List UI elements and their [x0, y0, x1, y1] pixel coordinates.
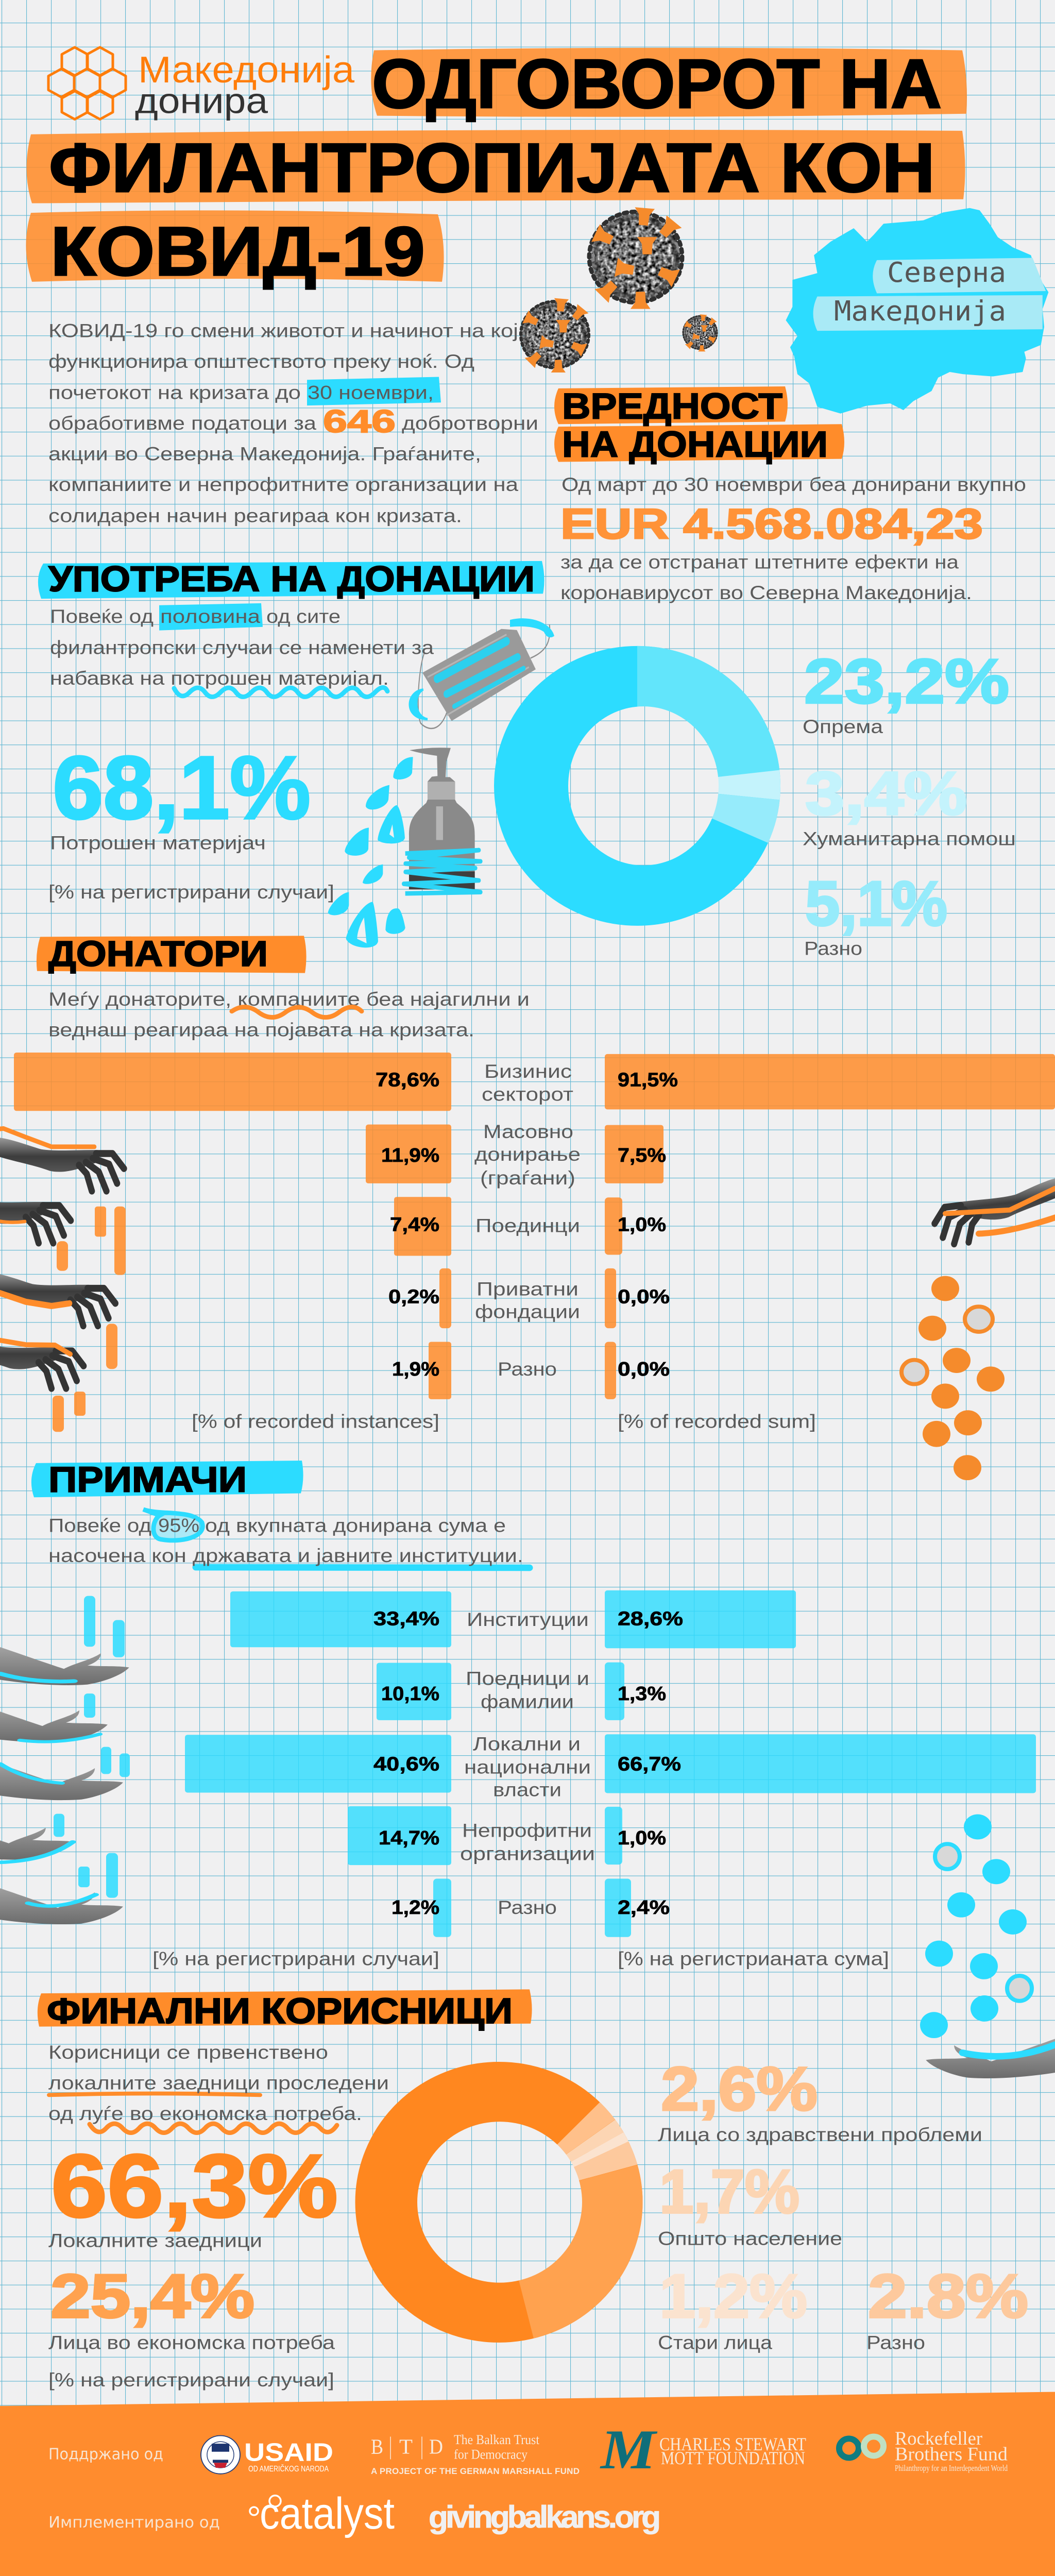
- chart: donor bars: 78,6%: [376, 1069, 439, 1091]
- intro text: Корисници се првенствено: [48, 2041, 328, 2063]
- chart: donor bars: Бизинис: [484, 1060, 572, 1082]
- logo: Rockefeller Brothers Fund: Philanthropy for an Interdependent World: [895, 2463, 1008, 2473]
- title: ОДГОВОРОТ НА: [372, 45, 942, 123]
- stat: 1,2% стари лица: 1,2%: [659, 2261, 807, 2331]
- title band 3: [26, 210, 444, 282]
- logo: Balkan Trust for Democracy: A PROJECT OF THE GERMAN MARSHALL FUND: [371, 2466, 580, 2476]
- stat: 1,7% општо население: Општо население: [658, 2228, 842, 2249]
- logo: Balkan Trust for Democracy: B: [371, 2435, 383, 2459]
- intro text: 95%: [158, 1515, 199, 1536]
- stat: 3,4% хуманитарна помош: [803, 759, 1016, 850]
- intro text block: солидарен начин реагираа кон кризата.: [48, 505, 462, 527]
- panel: донатори: [0, 934, 1055, 1480]
- icon: giving hands left: [0, 1128, 126, 1432]
- chart: recipient bars: Локални и: [473, 1733, 581, 1754]
- heading: финални корисници: ФИНАЛНИ КОРИСНИЦИ: [47, 1991, 513, 2031]
- logo: Balkan Trust for Democracy: T: [399, 2435, 413, 2459]
- intro text block: акции во Северна Македонија. Граѓаните,: [48, 443, 481, 464]
- intro text: Меѓу донаторите, компаниите беа најагилни и: [48, 989, 530, 1010]
- chart: donor bars: 0,0%: [618, 1286, 670, 1308]
- stat: 25,4% лица во економска потреба: Лица во економска потреба: [48, 2332, 335, 2353]
- icon: drops: [328, 757, 413, 947]
- intro text block: функционира општеството преку ноќ. Од: [48, 350, 474, 372]
- chart: donor bars: [% of recorded sum]: [618, 1411, 816, 1432]
- intro text: [50, 603, 434, 697]
- icon: hexagon logo: [48, 47, 126, 119]
- logo: Charles Stewart Mott Foundation: M: [600, 2418, 658, 2481]
- chart: recipient bars: 14,7%: [379, 1827, 439, 1849]
- panel: финални корисници: [38, 1989, 1028, 2391]
- icon: receiving hands left: [0, 1596, 130, 1924]
- chart: recipient bars: 40,6%: [373, 1753, 439, 1775]
- icon: sanitizer bottle: [403, 748, 481, 893]
- logo: Balkan Trust for Democracy: for Democracy: [454, 2447, 528, 2462]
- chart: recipient bars: 2,4%: [618, 1896, 670, 1919]
- icon: mask strap accent: [510, 618, 554, 637]
- logo: Македонија донира: донира: [135, 80, 268, 121]
- icon: blue coins: [920, 1814, 1032, 2038]
- intro text: од вкупната донирана сума е: [205, 1515, 506, 1536]
- intro text: [48, 1510, 530, 1568]
- icon: orange coins: [901, 1276, 1005, 1480]
- stat: 5,1% разно: Разно: [804, 938, 862, 959]
- intro text: локалните заедници проследени: [48, 2072, 389, 2094]
- heading: примачи: [31, 1459, 303, 1499]
- chart: recipient bars: Разно: [498, 1896, 557, 1918]
- chart: recipient bars: фамилии: [481, 1691, 574, 1712]
- stat: 68,1% потрошен материјал: [48, 738, 334, 903]
- stat: 5,1% разно: 5,1%: [805, 869, 947, 939]
- icon: small virus: [683, 314, 717, 351]
- logo: Balkan Trust for Democracy: [371, 2432, 580, 2476]
- label: поддржано од: Поддржано од: [48, 2446, 163, 2463]
- stat: 2,6% лица со здравствени проблеми: [658, 2054, 982, 2145]
- stat: 1,2% стари лица: Стари лица: [658, 2332, 772, 2353]
- intro text: Повеќе од: [50, 605, 154, 627]
- chart: donor bars: [% of recorded instances]: [192, 1411, 439, 1432]
- logo: Charles Stewart Mott Foundation: [600, 2418, 806, 2481]
- link: givingbalkans.org: givingbalkans.org: [429, 2500, 661, 2534]
- chart: donor bars: 0,2%: [388, 1286, 439, 1308]
- panel: вредност на донации: [554, 386, 1026, 603]
- intro text block: 30 ноември,: [308, 382, 434, 403]
- chart: recipient bars: Институции: [467, 1609, 589, 1630]
- chart: recipient bars: 66,7%: [618, 1753, 681, 1775]
- logo: USAID: [201, 2436, 333, 2474]
- chart: beneficiaries donut: [397, 2103, 601, 2301]
- logo: USAID: USAID: [244, 2438, 333, 2466]
- stat: 68,1% потрошен материјал: [% на регистрирани случаи]: [48, 882, 334, 903]
- logo: Rockefeller Brothers Fund: Rockefeller: [895, 2428, 982, 2449]
- intro text block: КОВИД-19 го смени животот и начинот на кој: [48, 320, 518, 341]
- title: КОВИД-19: [50, 213, 425, 290]
- heading: донатори: ДОНАТОРИ: [48, 934, 268, 974]
- panel: примачи: [0, 1459, 1055, 2078]
- logo: Rockefeller Brothers Fund: Brothers Fund: [895, 2444, 1008, 2465]
- chart: recipient bars: 28,6%: [618, 1608, 683, 1630]
- title band 2: [26, 130, 965, 204]
- intro text: од луѓе во економска потреба.: [48, 2103, 362, 2124]
- stat: 25,4% лица во економска потреба: [48, 2261, 335, 2391]
- title: [26, 45, 967, 290]
- heading: употреба на донации: УПОТРЕБА НА ДОНАЦИИ: [48, 558, 535, 599]
- logo: Balkan Trust for Democracy: The Balkan Trust: [454, 2432, 540, 2447]
- intro text: [48, 989, 530, 1041]
- stat: 2.8% разно: 2.8%: [868, 2261, 1028, 2331]
- chart: donor bars: фондации: [475, 1301, 580, 1322]
- chart: recipient bars: Непрофитни: [462, 1820, 592, 1841]
- chart: recipient bars: власти: [493, 1779, 561, 1800]
- chart: donor bars: донирање: [474, 1143, 581, 1165]
- chart: recipient bars: 33,4%: [373, 1608, 439, 1630]
- stat: 2.8% разно: Разно: [866, 2332, 925, 2353]
- logo: Rockefeller Brothers Fund: [839, 2428, 1008, 2473]
- chart: donor bars: 91,5%: [618, 1069, 678, 1091]
- chart: donor bars: (граѓани): [480, 1167, 575, 1189]
- stat: 68,1% потрошен материјал: 68,1%: [53, 738, 311, 838]
- logo: Charles Stewart Mott Foundation: CHARLES STEWART: [659, 2433, 806, 2454]
- stat: 3,4% хуманитарна помош: 3,4%: [805, 759, 967, 828]
- logo: Македонија донира: Македонија: [138, 49, 354, 91]
- chart: donor bars: 1,0%: [618, 1214, 666, 1236]
- chart: donor bars: 7,4%: [390, 1214, 439, 1236]
- intro text block: 646: [323, 404, 396, 439]
- intro text block: компаниите и непрофитните организации на: [48, 474, 518, 495]
- chart: recipient bars: [% на регистрианата сума]: [618, 1948, 889, 1969]
- heading: примачи: ПРИМАЧИ: [48, 1459, 247, 1499]
- logo: Catalyst: catalyst: [260, 2489, 395, 2538]
- heading: вредност на донации: ВРЕДНОСТ: [562, 386, 782, 427]
- map: Северна Македонија: [786, 208, 1048, 414]
- intro text block: добротворни: [402, 412, 538, 434]
- intro text: веднаш реагираа на појавата на кризата.: [48, 1019, 474, 1041]
- icon: face mask: [410, 624, 550, 728]
- stat: 23,2% опрема: Опрема: [803, 716, 883, 737]
- intro text: набавка на потрошен материјал.: [50, 668, 389, 689]
- chart: donor bars: 0,0%: [618, 1358, 670, 1380]
- panel: вредност на донации: Од март до 30 ноември беа донирани вкупно: [561, 474, 1026, 495]
- stat: 66,3% локални заедници: Локалните заедници: [48, 2230, 262, 2251]
- heading: вредност на донации: НА ДОНАЦИИ: [562, 425, 828, 465]
- intro text: половина: [160, 605, 260, 627]
- footer band: [0, 2392, 1055, 2576]
- stat: 2,6% лица со здравствени проблеми: Лица со здравствени проблеми: [658, 2124, 982, 2145]
- stat: 68,1% потрошен материјал: Потрошен материјач: [50, 832, 266, 853]
- panel: вредност на донации: за да се отстранат штетните ефекти на: [560, 551, 959, 572]
- stat: 23,2% опрема: 23,2%: [804, 647, 1009, 717]
- chart: recipient bars: Поедници и: [466, 1668, 589, 1689]
- stat: 2,6% лица со здравствени проблеми: 2,6%: [661, 2054, 818, 2123]
- logo: Charles Stewart Mott Foundation: MOTT FOUNDATION: [661, 2448, 805, 2468]
- stat: 3,4% хуманитарна помош: Хуманитарна помош: [803, 828, 1016, 850]
- chart: donor bars: Разно: [498, 1358, 557, 1380]
- title band 1: [371, 48, 967, 117]
- icon: giving hand right: [932, 1178, 1055, 1246]
- chart: recipient bars: 1,2%: [392, 1896, 439, 1919]
- title: ФИЛАНТРОПИЈАТА КОН: [49, 129, 935, 207]
- stat: 66,3% локални заедници: 66,3%: [51, 2137, 338, 2236]
- chart: donor bars: 11,9%: [381, 1144, 439, 1166]
- chart: recipient bars: [152, 1590, 1036, 1969]
- icon: large virus: [589, 207, 682, 309]
- chart: donor bars: [14, 1053, 1055, 1432]
- chart: donor bars: Масовно: [483, 1121, 573, 1142]
- heading: вредност на донации: [554, 386, 844, 465]
- stat: 25,4% лица во економска потреба: [% на регистрирани случаи]: [48, 2369, 334, 2391]
- stat: 2.8% разно: [866, 2261, 1028, 2353]
- intro text block: обработивме податоци за: [48, 412, 316, 434]
- chart: recipient bars: [% на регистрирани случаи]: [152, 1948, 439, 1969]
- chart: recipient bars: 10,1%: [381, 1683, 439, 1705]
- footer: [0, 2392, 1055, 2576]
- icon: medium virus: [521, 298, 589, 372]
- stat: 23,2% опрема: [803, 647, 1009, 737]
- intro text block: [48, 320, 538, 527]
- chart: recipient bars: 1,3%: [618, 1683, 666, 1705]
- chart: donor bars: 7,5%: [618, 1144, 666, 1166]
- stat: 25,4% лица во економска потреба: 25,4%: [50, 2261, 254, 2331]
- intro text: од сите: [266, 605, 341, 627]
- stat: 1,7% општо население: 1,7%: [659, 2157, 799, 2226]
- chart: recipient bars: организации: [460, 1843, 595, 1864]
- intro text: [48, 2041, 389, 2133]
- chart: donor bars: 1,9%: [392, 1358, 439, 1380]
- logo: Balkan Trust for Democracy: D: [429, 2435, 443, 2459]
- logo: USAID: OD AMERIČKOG NARODA: [248, 2464, 329, 2473]
- chart: donor bars: секторот: [482, 1083, 573, 1105]
- intro text block: почетокот на кризата до: [48, 382, 301, 403]
- panel: употреба на донации: [38, 558, 1016, 959]
- icon: receiving hand right: [926, 2039, 1055, 2078]
- chart: recipient bars: национални: [464, 1756, 591, 1777]
- map: Северна Македонија: Македонија: [834, 295, 1006, 327]
- chart: donor bars: Приватни: [477, 1278, 578, 1300]
- chart: usage donut: [558, 708, 717, 863]
- highlight: 30 ноември: [307, 377, 441, 405]
- chart: donor bars: Поединци: [475, 1215, 580, 1236]
- total donated amount: EUR 4.568.084,23: [560, 500, 983, 548]
- map: Северна Македонија: Северна: [887, 256, 1006, 289]
- intro text: насочена кон државата и јавните институции.: [48, 1545, 523, 1566]
- panel: вредност на донации: коронавирусот во Северна Македонија.: [560, 582, 972, 603]
- stat: 1,7% општо население: [658, 2157, 842, 2249]
- label: имплементирано од: Имплементирано од: [48, 2514, 220, 2532]
- intro text: Повеќе од: [48, 1515, 151, 1536]
- intro text: филантропски случаи се наменети за: [50, 637, 434, 658]
- chart: recipient bars: 1,0%: [618, 1827, 666, 1849]
- logo: Македонија донира: [48, 47, 354, 121]
